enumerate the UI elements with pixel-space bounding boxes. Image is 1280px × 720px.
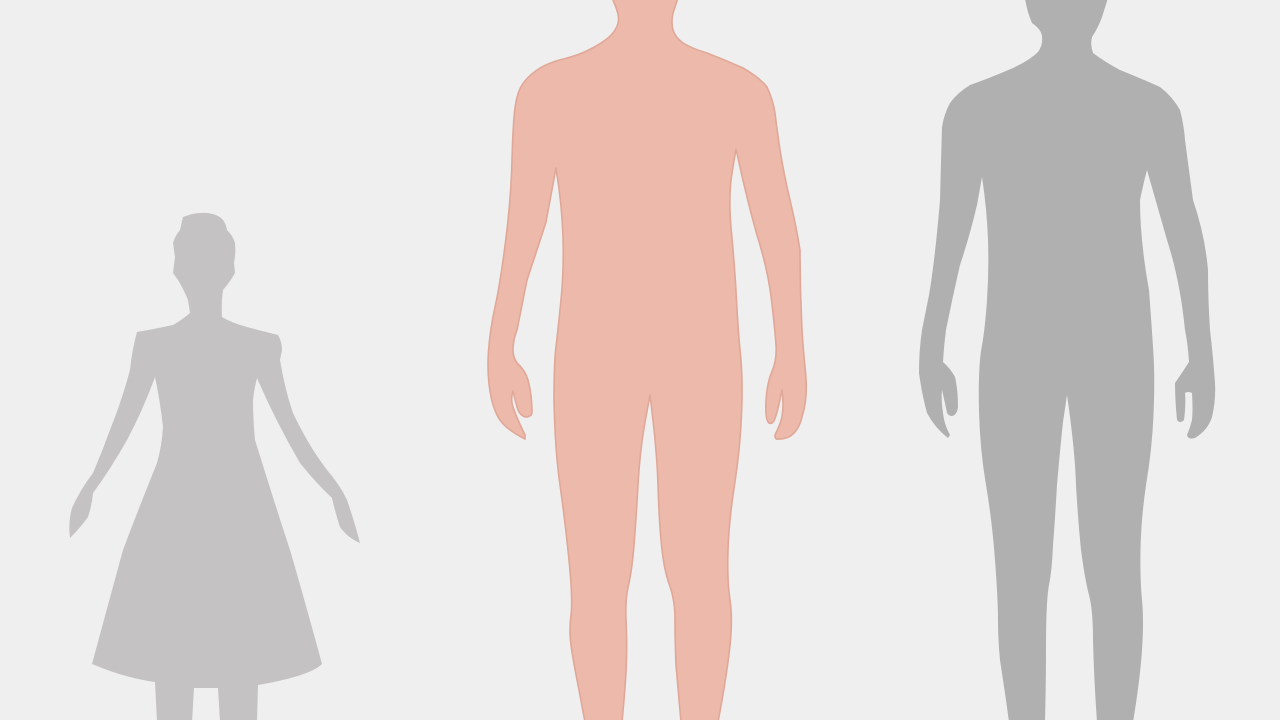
silhouette: man on the right in grey bbox=[919, 0, 1215, 720]
silhouette: girl in dress bbox=[69, 213, 360, 720]
silhouette: central figure highlighted in pink bbox=[488, 0, 806, 720]
